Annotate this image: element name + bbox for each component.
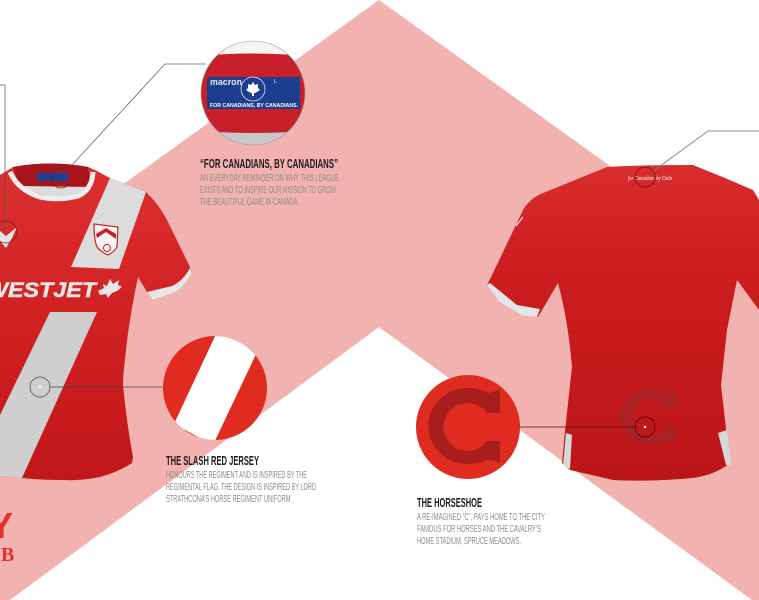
text: slash description: HONOURS THE REGIMENT AND IS INSPIRED BY THE [166,470,307,481]
back neck tagline: for Canadians by Cndn [628,175,672,182]
leader circle [635,167,655,187]
back marker dot [644,426,646,428]
callout: macron crest marker [0,85,17,243]
red collar [200,54,306,133]
icon: sponsor maple leaf [98,279,122,298]
collar inner [13,164,91,187]
text: slash description: REGIMENTAL FLAG. THE DESIGN IS INSPIRED BY LORD [166,482,316,493]
text: slash description [166,470,316,505]
neck label [37,173,68,181]
horseshoe C [428,388,500,464]
club name fragment [0,505,14,566]
text: for canadians description: THE BEAUTIFUL GAME IN CANADA. [200,197,299,208]
back jersey body [487,165,759,481]
heading: slash red jersey: THE SLASH RED JERSEY [166,453,259,468]
back horseshoe mark [620,388,677,446]
horseshoe circle [416,375,520,479]
label collar background [219,42,287,54]
leader circle [51,168,71,188]
callout image: horseshoe [416,375,655,479]
slash marker circle [30,377,50,397]
text: for canadians description: EXISTS AND TO INSPIRE OUR MISSION TO GROW [200,185,336,196]
slash marker dot [39,386,41,388]
text: for canadians description: AN EVERYDAY REMINDER ON WHY THIS LEAGUE [200,173,339,184]
macron brand: macron [210,77,242,88]
text: horseshoe description: HOME STADIUM, SPRUCE MEADOWS. [417,536,521,547]
horseshoe leader [520,426,635,428]
text: horseshoe description [417,512,545,547]
upper slash [71,178,146,269]
back marker circle [635,417,655,437]
shirt edge [219,132,287,145]
back sleeve tick [516,217,523,226]
text: for canadians description [200,173,339,208]
slash band [175,336,256,440]
text: horseshoe description: A RE-IMAGINED “C”, PAYS HOME TO THE CITY [417,512,545,523]
sleeve cuff [147,268,192,300]
icon: macron logo [0,227,17,248]
marker line [0,85,5,232]
text: horseshoe description: FAMOUS FOR HORSES AND THE CAVALRY’S [417,524,541,535]
blue label [207,77,300,109]
size mark: L [274,79,277,85]
slash leader [50,386,163,388]
icon: maple leaf badge [241,77,265,101]
back hem panel left [563,433,572,469]
leader line [652,131,759,172]
crest [94,224,118,255]
heading: horseshoe: THE HORSESHOE [417,495,482,510]
back jersey [487,165,759,481]
collar shirt inside [20,186,91,197]
back left cuff [487,283,540,317]
collar ring [10,172,93,199]
marker circle [0,221,17,243]
back hem panel right [718,430,731,465]
callout image: neck label [200,40,306,146]
front jersey body [0,164,192,480]
leader line [72,64,206,165]
callout: back neck leader [635,131,759,187]
heading: for canadians: “FOR CANADIANS, BY CANADIANS” [200,156,338,171]
club subtitle last letter: B [1,544,14,566]
text: slash description: STRATHCONA’S HORSE REGIMENT UNIFORM. [166,494,292,505]
lower slash [0,312,97,478]
callout image: slash [30,332,267,445]
callout: neck label leader [51,64,206,188]
callout outline: neck label [201,41,305,145]
slash circle [163,336,267,440]
label tagline: FOR CANADIANS, BY CANADIANS. [210,103,298,109]
front jersey [0,164,192,480]
